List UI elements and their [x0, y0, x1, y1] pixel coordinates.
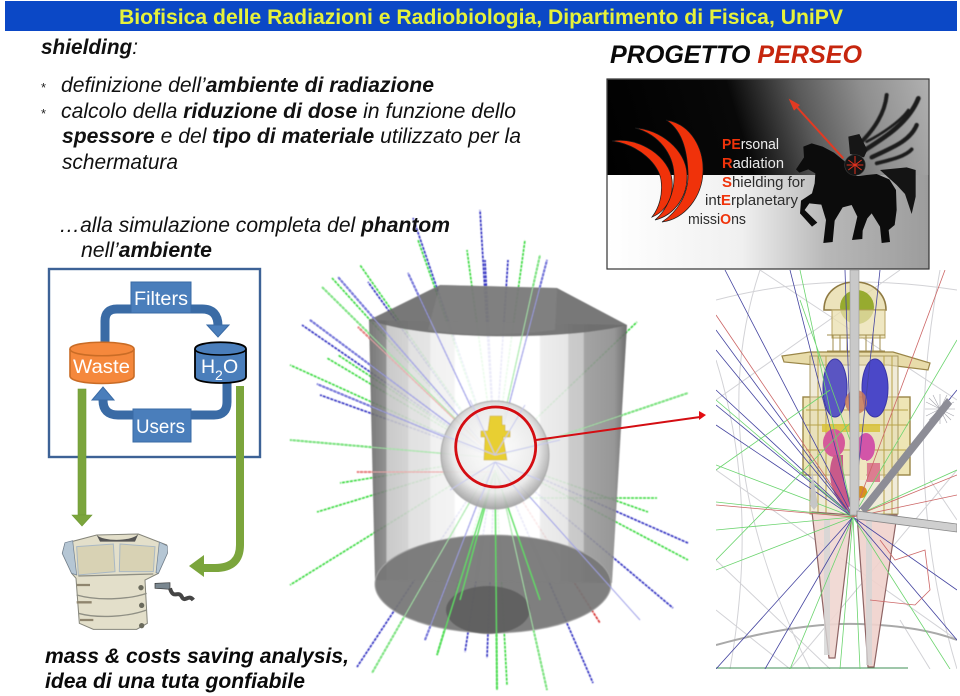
text block: shielding: calcolo della riduzione di dose in funzione dello: [61, 99, 516, 123]
arrow: users to waste: [92, 387, 134, 415]
panel title: PROGETTO PERSEO: PROGETTO PERSEO: [610, 41, 863, 69]
box: Filters: [131, 282, 191, 313]
phantom small: [481, 416, 510, 460]
text block: shielding: schermatura: [62, 150, 178, 174]
arrow: filters to water: [190, 309, 229, 337]
flow diagram: [49, 269, 260, 457]
green arrow: waste to suit: [72, 389, 92, 526]
icon: pegasus: [789, 95, 918, 243]
logo acronym text: Radiation: [722, 156, 784, 172]
text block: shielding: *: [41, 80, 46, 95]
red focus circle and leader arrow: [456, 407, 706, 487]
logo acronym text: Shielding for: [722, 175, 805, 191]
body: structural rods: [810, 270, 957, 532]
logo acronym text: PErsonal: [722, 137, 779, 153]
body: head: [824, 282, 886, 351]
header bar: [5, 1, 957, 31]
vessel top cone: [369, 285, 627, 336]
tank: Waste: [70, 342, 134, 384]
text block: shielding: *: [41, 106, 46, 121]
box: Filters: Filters: [134, 288, 188, 310]
body: shoulders and torso: [782, 352, 930, 514]
frame: [49, 269, 260, 457]
text block: mass and costs: [45, 644, 349, 693]
box: Users: [133, 409, 191, 442]
tank: H2O: [195, 342, 246, 383]
text block: mass and costs: idea di una tuta gonfiabile: [45, 669, 305, 693]
body: lungs: [823, 359, 888, 417]
logo acronym text: [688, 137, 805, 228]
text block: shielding: shielding:: [41, 35, 138, 59]
particle tracks around shield: [290, 210, 688, 690]
panel: phantom detail: [716, 270, 957, 680]
tank: H2O: H: [201, 356, 215, 378]
arrow: waste to filters: [105, 309, 132, 343]
logo acronym text: intErplanetary: [705, 193, 799, 209]
green arrow: water to suit: [189, 386, 240, 577]
tank: H2O: O: [223, 356, 238, 378]
icon: inflatable suit: [62, 534, 193, 629]
text block: phantom simulation: [59, 213, 450, 262]
coloured radiating tracks: [716, 270, 957, 669]
text block: shielding: definizione dell’ambiente di radiazione: [61, 73, 434, 97]
icon: radiation crescents: [612, 120, 703, 222]
vessel bottom: [375, 535, 611, 633]
text block: shielding: [41, 35, 521, 174]
tank: H2O: 2: [215, 367, 223, 383]
box: Users: Users: [136, 416, 185, 438]
panel: PERSEO logo: [607, 79, 929, 269]
text block: phantom simulation: nell’ambiente: [81, 238, 212, 262]
arrow: water to users: [190, 382, 227, 415]
tracks inside vessel: [290, 255, 688, 690]
tank: Waste: Waste: [73, 356, 130, 378]
header title: Biofisica delle Radiazioni e Radiobiologia, Dipartimento di Fisica, UniPV: [119, 6, 843, 29]
text block: mass and costs: mass & costs saving analysis,: [45, 644, 349, 668]
body: organs: [822, 424, 880, 510]
wireframe background: [716, 270, 957, 669]
body: legs: [812, 512, 897, 667]
central sphere with phantom: [430, 400, 560, 509]
text block: shielding: spessore e del tipo di materiale utilizzato per la: [62, 124, 521, 148]
shielding vessel: [369, 285, 627, 634]
dose wheel: [925, 394, 955, 424]
vessel body: [369, 320, 627, 583]
text block: phantom simulation: …alla simulazione completa del phantom: [59, 213, 450, 237]
logo acronym text: missiOns: [688, 212, 746, 228]
